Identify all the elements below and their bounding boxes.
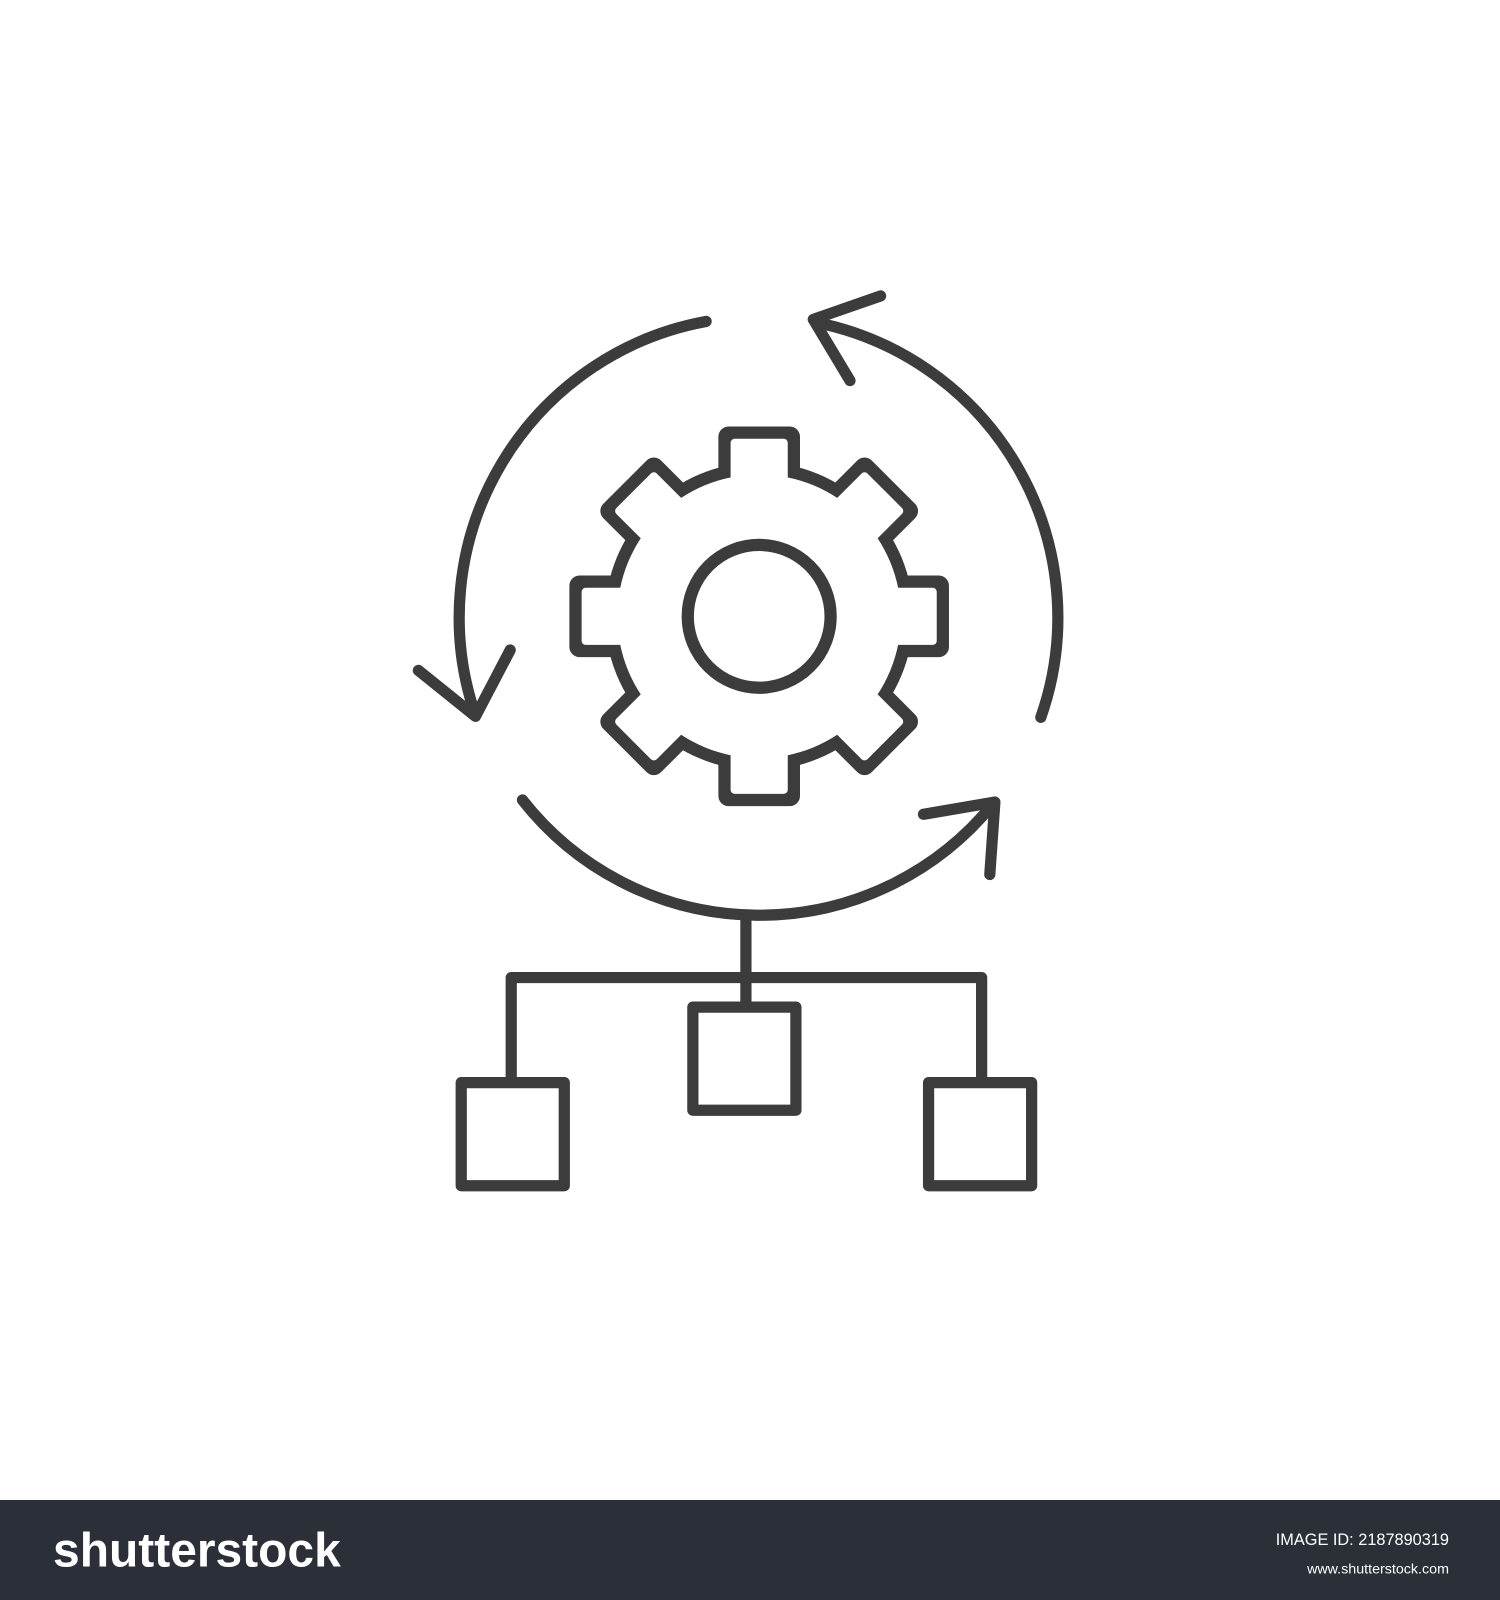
footer url: www.shutterstock.com bbox=[1306, 1561, 1449, 1577]
footer bar bbox=[0, 1500, 1500, 1600]
icon: hierarchy tree bbox=[461, 918, 1032, 1186]
icon: circular arrows bbox=[418, 296, 1058, 915]
footer image id: IMAGE ID: 2187890319 bbox=[1276, 1531, 1449, 1549]
icon: gear bbox=[569, 427, 949, 806]
footer logo: shutterstock bbox=[53, 1524, 341, 1577]
